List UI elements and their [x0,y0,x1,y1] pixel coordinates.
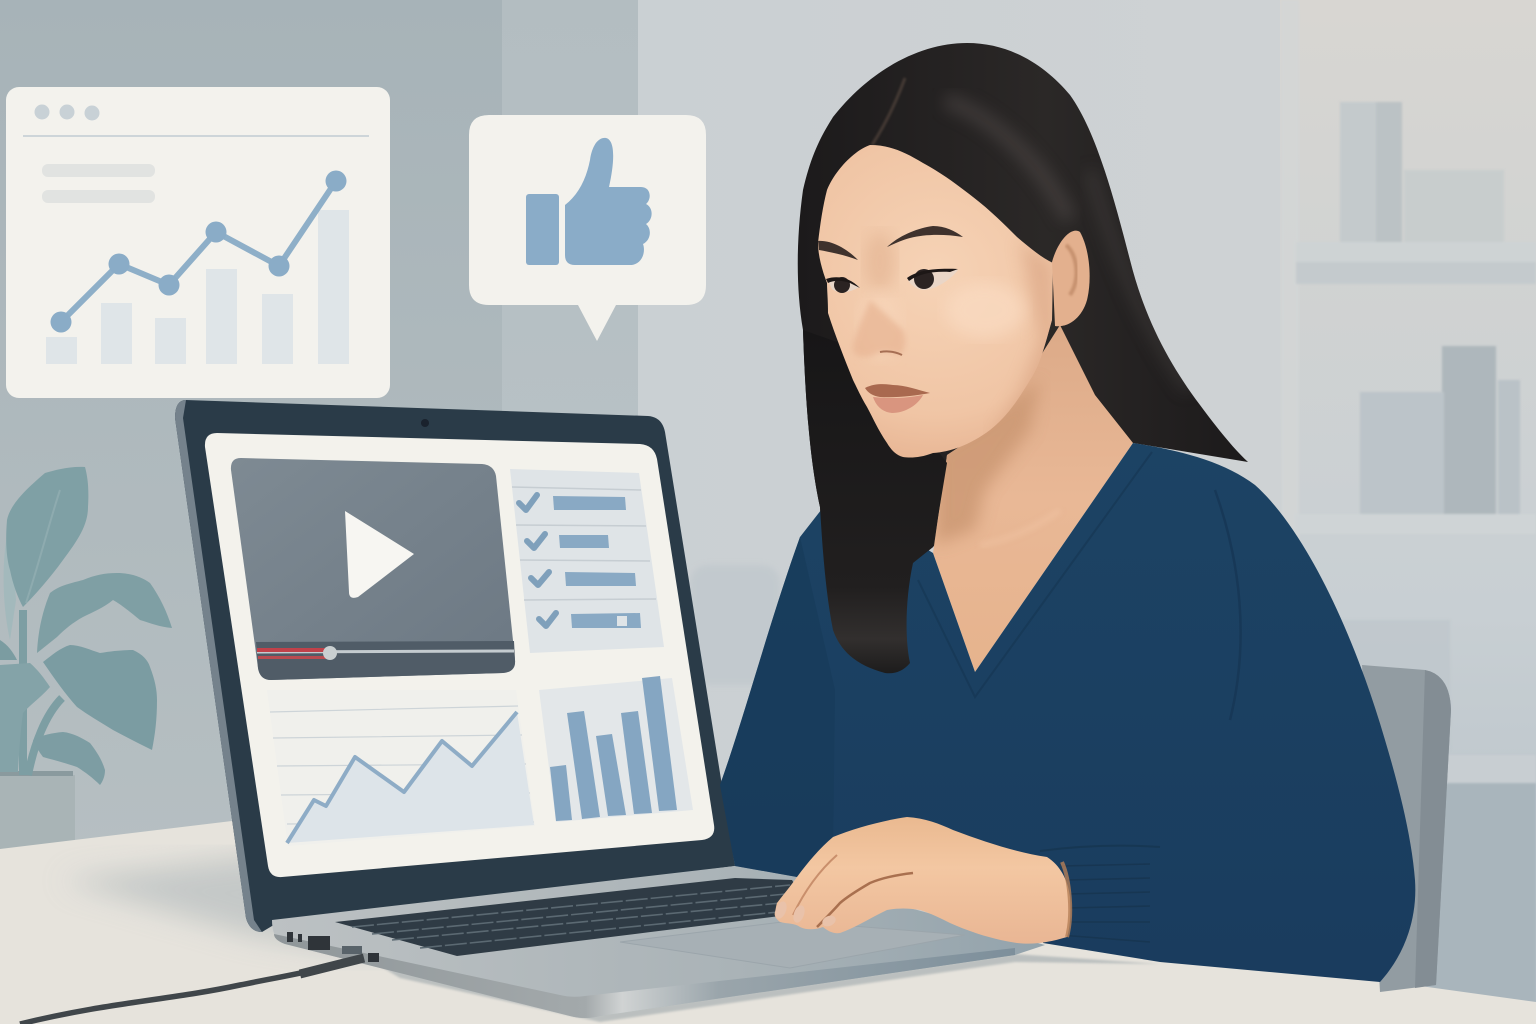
background bookshelf [1281,0,1536,1024]
progress bar [257,651,514,652]
laptop [20,400,1045,1024]
nose [853,300,905,357]
hair lock [803,330,947,673]
trend line [50,170,346,332]
text placeholder lines [42,164,155,203]
eyes [826,269,958,293]
sweater [720,443,1415,982]
laptop base [272,866,1045,1018]
neck shadow [935,386,1039,545]
eyebrows [818,226,963,260]
analytics card [6,87,390,398]
laptop screen [205,433,714,877]
hair behind [798,43,1248,673]
potted plant [0,467,172,849]
cable [20,958,362,1024]
line chart [267,690,535,846]
background furniture blur [690,565,780,685]
checklist panel [510,469,664,653]
neck and chest [933,325,1133,672]
ear [1052,231,1090,326]
hand [773,817,1070,944]
thumbs-up speech bubble [469,115,706,341]
keyboard [335,878,812,956]
window dots [34,104,100,120]
woman [720,43,1415,982]
laptop lid [175,400,735,932]
lips [865,384,930,413]
desk [0,821,1536,1024]
sweater details [720,452,1241,877]
trackpad [620,921,965,968]
video player [231,458,515,680]
bar chart [539,676,693,822]
face shading [863,234,1053,420]
play icon [345,511,414,598]
sleeve cuff [1040,846,1160,942]
hair sheen [872,78,1190,390]
face [818,145,1053,458]
laptop ports [287,932,379,962]
bars [46,210,349,364]
icon: thumbs up [526,138,652,265]
chair [1362,665,1451,992]
